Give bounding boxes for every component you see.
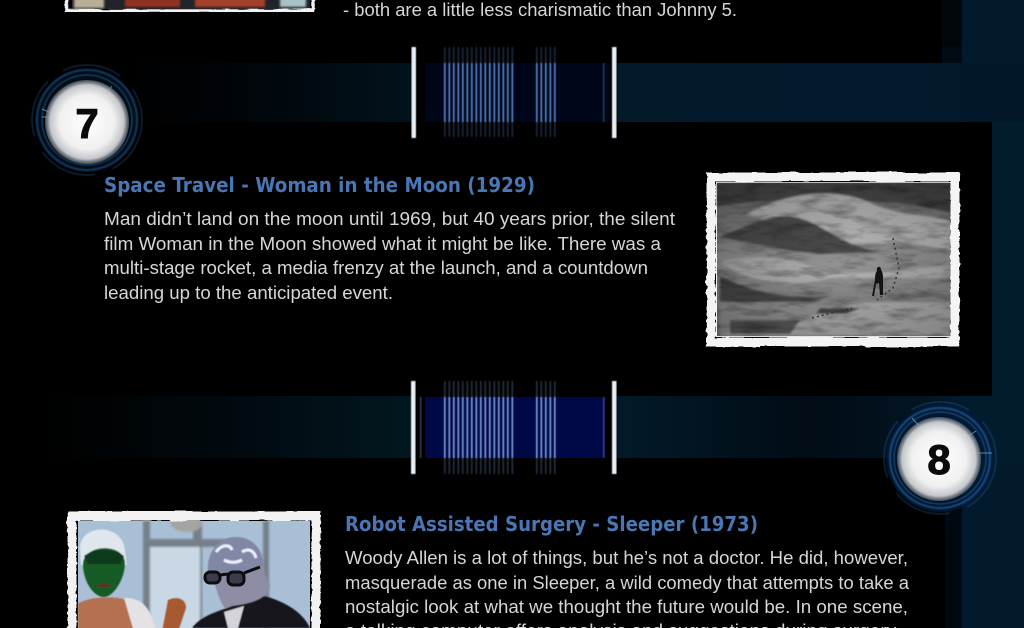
badge: number 8: 8 — [927, 436, 951, 483]
text block: entry 8: nostalgic look at what we thought the future would be. In one scene, — [345, 596, 908, 617]
badge: number 8 — [884, 402, 996, 514]
figure: nurse with green mask — [78, 530, 186, 628]
band: divider 7 to 8 — [40, 381, 1024, 474]
figure: glasses — [205, 567, 260, 585]
heading: entry 8: Robot Assisted Surgery - Sleeper (1973) — [345, 512, 758, 536]
barcode lines bottom — [420, 381, 604, 474]
text block: entry 7 — [104, 208, 675, 303]
band: divider 6 to 7 — [130, 47, 1024, 138]
text block: entry 7: leading up to the anticipated event. — [104, 282, 393, 303]
text block: entry 7: multi-stage rocket, a media frenzy at the launch, and a countdown — [104, 257, 648, 278]
image: lunar landscape with figure — [711, 177, 955, 342]
image: robot movie still, previous entry — [66, 0, 313, 11]
badge: number 7 — [32, 65, 142, 175]
barcode lines top — [444, 47, 604, 137]
heading: entry 7: Space Travel - Woman in the Moon (1929) — [104, 173, 535, 197]
text block: entry 7: Man didn’t land on the moon until 1969, but 40 years prior, the silent — [104, 208, 675, 229]
text block: entry 7: film Woman in the Moon showed what it might be like. There was a — [104, 233, 662, 254]
text block: entry 8: masquerade as one in Sleeper, a wild comedy that attempts to take a — [345, 572, 910, 593]
badge: number 7: 7 — [75, 100, 99, 147]
text block: entry 8 — [345, 547, 910, 628]
figure: man with silver helmet and glasses — [192, 537, 310, 628]
image: Sleeper movie still — [72, 516, 316, 628]
text block: entry 8: Woody Allen is a lot of things, but he’s not a doctor. He did, however, — [345, 547, 908, 568]
